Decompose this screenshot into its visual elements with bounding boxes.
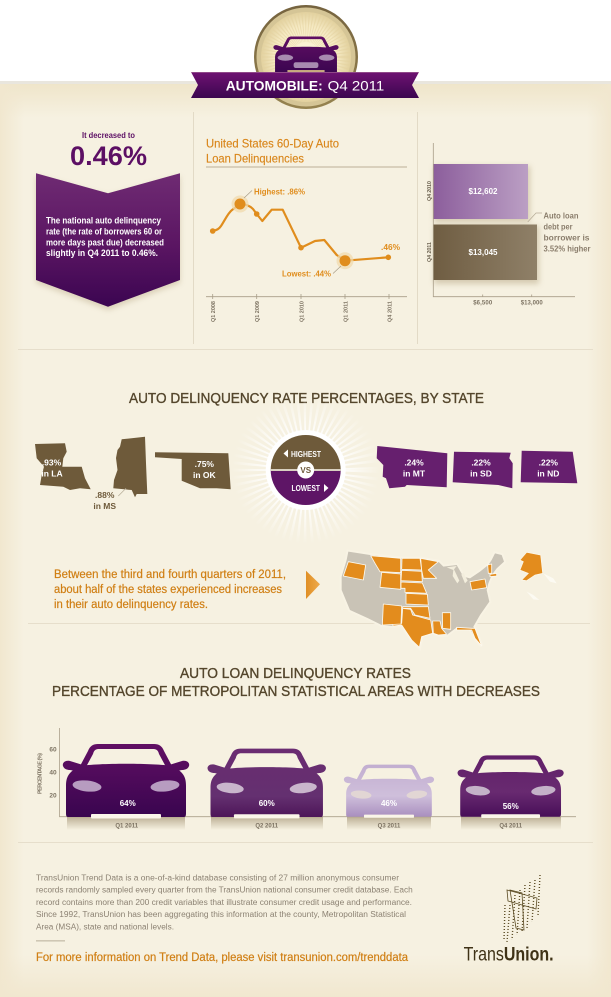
panel: bar chart of debt per borrower — [427, 143, 591, 306]
highest label: HIGHEST — [291, 450, 321, 459]
y axis ticks: 40 — [49, 770, 57, 776]
y labels: Q4 2011 — [427, 242, 433, 262]
chart title: United States 60-Day Auto — [206, 136, 339, 150]
panel: line chart of delinquencies — [206, 136, 407, 322]
quarter labels: Q4 2011 — [499, 824, 523, 830]
panel: lowest states — [377, 446, 577, 488]
bar value Q4 2011: $13,045 — [468, 248, 498, 257]
chart title: Loan Delinquencies — [206, 152, 304, 166]
x labels: $13,000 — [521, 300, 543, 306]
banner text: rate (the rate of borrowers 60 or — [46, 226, 162, 236]
map: US states with increases — [342, 552, 557, 647]
leader lines — [244, 190, 341, 274]
big number: 0.46% — [70, 141, 147, 171]
quarter labels — [115, 824, 523, 830]
logo: TransUnion — [464, 875, 554, 966]
state: Mississippi: in MS — [93, 501, 116, 511]
text block: states with increases — [54, 569, 286, 611]
axes — [433, 143, 575, 297]
axis labels: Q4 2011 — [387, 301, 393, 322]
axis labels: Q1 2010 — [299, 301, 305, 322]
chevron banner — [36, 173, 180, 307]
text block: about Trend Data: Since 1992, TransUnion has been aggregating this information at the county, Metropolitan Statistical — [36, 910, 406, 919]
banner text: slightly in Q4 2011 to 0.46%. — [46, 248, 158, 258]
text block: about Trend Data: records randomly sampled every quarter from the TransUnion national consumer credit database. Each — [36, 886, 413, 894]
car: Q1 2011 — [63, 744, 189, 818]
title ribbon — [191, 72, 419, 98]
y axis ticks — [49, 746, 57, 800]
car: Q3 2011 — [344, 765, 434, 818]
state: Louisiana: in LA — [41, 468, 63, 478]
map base — [342, 552, 504, 647]
state: North Dakota: in ND — [537, 468, 559, 478]
banner shadow — [36, 176, 180, 310]
heading: metropolitan areas: AUTO LOAN DELINQUENCY RATES — [180, 666, 411, 682]
bar Q4 2010 — [434, 164, 528, 219]
state: Louisiana: .93% — [42, 458, 62, 468]
y axis ticks: 60 — [49, 746, 57, 754]
x labels — [473, 300, 543, 306]
text block: about Trend Data: record contains more than 200 credit variables that illustrate consumer credit usage and performance. — [36, 898, 412, 907]
annotation: 3.52% higher — [544, 244, 591, 254]
contiguous states — [342, 552, 504, 647]
x labels: $6,500 — [473, 300, 493, 306]
quarter labels: Q2 2011 — [255, 824, 279, 830]
car shadows — [67, 817, 561, 830]
panel: car chart — [38, 728, 576, 830]
y axis title: PERCENTAGE (%) — [38, 753, 44, 794]
y axis ticks: 20 — [49, 792, 57, 800]
bar shadows — [434, 166, 539, 284]
car values — [120, 799, 519, 811]
icon: car in medal — [273, 36, 339, 74]
text block: about Trend Data: TransUnion Trend Data is a one-of-a-kind database consisting of 27 million anonymous consumer — [36, 874, 399, 882]
Alaska panhandle and Hawaii — [527, 573, 557, 600]
banner text: The national auto delinquency — [46, 216, 161, 226]
state: Oklahoma: in OK — [193, 470, 216, 480]
state: South Dakota: .22% — [471, 458, 491, 468]
state: Mississippi — [93, 437, 147, 511]
heading: metropolitan areas: PERCENTAGE OF METROPOLITAN STATISTICAL AREAS WITH DECREASES — [52, 684, 540, 700]
orange states — [343, 556, 497, 647]
axis labels — [211, 301, 393, 322]
axis labels: Q1 2009 — [255, 301, 261, 322]
quarter labels: Q1 2011 — [115, 824, 139, 830]
lowest half — [271, 470, 341, 505]
logo wordmark: TransUnion. — [464, 944, 554, 966]
car values: 56% — [503, 802, 519, 811]
axis labels: Q1 2008 — [211, 301, 217, 322]
bar Q4 2011 — [434, 224, 537, 280]
car: Q4 2011 — [458, 755, 564, 818]
panel: national rate — [36, 130, 180, 310]
car values: 60% — [259, 799, 275, 808]
heading: by state: AUTO DELINQUENCY RATE PERCENTAGES, BY STATE — [129, 391, 484, 407]
leader line — [528, 213, 542, 222]
logo mark — [504, 875, 540, 942]
highest label: Highest: .86% — [254, 186, 305, 196]
great lakes — [447, 566, 468, 583]
axis labels: Q1 2011 — [343, 301, 349, 322]
title text: AUTOMOBILE: — [226, 78, 323, 94]
caption: It decreased to — [82, 130, 135, 140]
arrow — [306, 571, 320, 599]
state: Montana: in MT — [403, 468, 426, 478]
state: North Dakota: .22% — [539, 458, 558, 468]
panel: highest states — [35, 437, 231, 511]
text block: about Trend Data — [36, 874, 413, 932]
state: Montana — [377, 446, 447, 488]
lowest label: LOWEST — [292, 484, 320, 493]
title date: Q4 2011 — [328, 78, 385, 94]
vs circle: VS — [300, 466, 312, 475]
medal emblem with car — [254, 5, 358, 109]
axis — [206, 294, 407, 299]
state: Louisiana — [35, 443, 91, 490]
chart title — [206, 136, 339, 166]
y labels — [427, 181, 433, 262]
highest half — [271, 435, 341, 470]
state: South Dakota: in SD — [470, 468, 492, 478]
quarter labels: Q3 2011 — [378, 824, 401, 830]
state: Mississippi: .88% — [95, 490, 115, 500]
Alaska — [520, 552, 543, 581]
text block: states with increases: about half of the states experienced increases — [54, 584, 282, 596]
data line — [213, 204, 388, 261]
text block: about Trend Data: Area (MSA), state and national levels. — [36, 922, 174, 932]
annotation: debt per — [544, 222, 573, 232]
car: Q2 2011 — [208, 749, 326, 818]
annotation: borrower is — [544, 232, 590, 242]
highlight halos — [232, 196, 248, 212]
last value label: .46% — [381, 242, 400, 252]
text block: states with increases: in their auto delinquency rates. — [54, 599, 208, 611]
state: Montana: .24% — [404, 458, 424, 468]
state: Oklahoma: .75% — [195, 459, 214, 469]
car values: 46% — [381, 799, 397, 808]
text block: states with increases: Between the third and fourth quarters of 2011, — [54, 569, 286, 581]
lowest label: Lowest: .44% — [282, 268, 331, 278]
link text: For more information on Trend Data, please visit transunion.com/trenddata — [36, 952, 409, 964]
state: South Dakota — [453, 452, 513, 488]
data points — [210, 198, 391, 266]
annotation: Auto loan — [544, 210, 578, 220]
bar value Q4 2010: $12,602 — [468, 187, 498, 196]
y labels: Q4 2010 — [427, 181, 433, 201]
state: Oklahoma — [155, 452, 231, 489]
annotation — [544, 210, 591, 254]
banner text — [46, 216, 164, 258]
heading: metropolitan areas — [52, 666, 540, 700]
sunburst versus badge — [254, 418, 358, 522]
car values: 64% — [120, 799, 136, 808]
state: North Dakota — [521, 451, 577, 483]
chart axes — [60, 728, 576, 817]
banner text: more days past due) decreased — [46, 238, 164, 248]
